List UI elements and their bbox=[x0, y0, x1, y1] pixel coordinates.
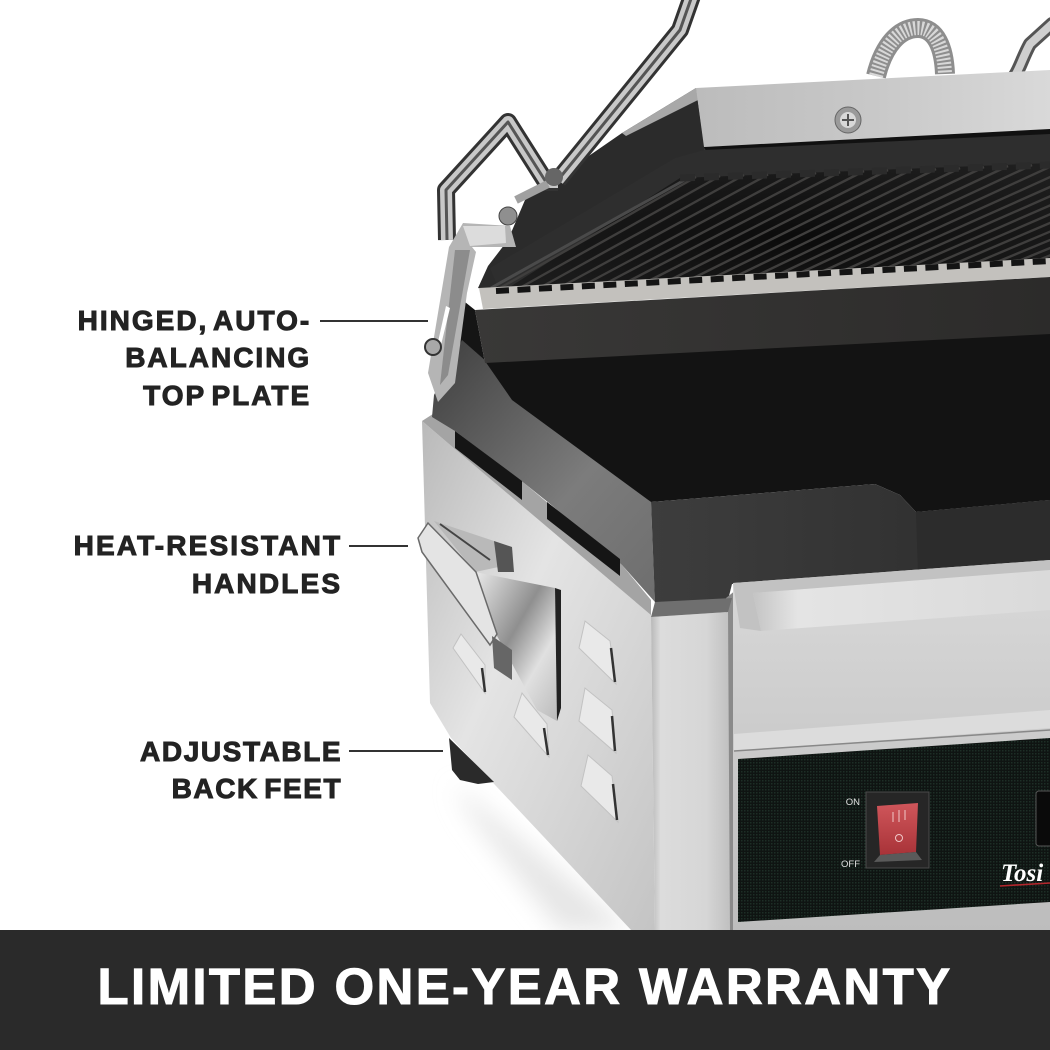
dark back casting of top plate bbox=[478, 88, 705, 292]
warranty banner bbox=[0, 930, 1050, 1050]
control panel bbox=[738, 738, 1050, 922]
chrome handle joint bbox=[545, 168, 563, 186]
icon: flexible hose at back bbox=[876, 28, 945, 76]
front face of lower plate bbox=[651, 484, 1050, 604]
dark wedge beside plate edge bbox=[452, 298, 485, 363]
back foot bbox=[449, 738, 494, 784]
metal top edge of base bbox=[422, 412, 651, 617]
silver strip under ribs bbox=[479, 258, 1050, 309]
leader line: feet bbox=[349, 750, 443, 752]
louvre shadows bbox=[482, 648, 617, 820]
label: adjustable back feet: BACK FEET bbox=[172, 773, 342, 804]
label: adjustable back feet bbox=[140, 736, 342, 804]
stainless side panel bbox=[422, 421, 655, 931]
label: hinged top plate: BALANCING bbox=[125, 342, 311, 373]
label: hinged top plate bbox=[78, 304, 311, 410]
logo: Tosi bbox=[1001, 860, 1043, 887]
textured plate edge bbox=[475, 277, 1050, 363]
label: heat-resistant handles: HEAT-RESISTANT bbox=[74, 530, 342, 561]
label: heat-resistant handles bbox=[74, 530, 342, 598]
upper chrome handle arm bbox=[558, 0, 692, 180]
right rear handle bbox=[1006, 24, 1050, 84]
steel hood with screw bbox=[696, 70, 1050, 152]
label: hinged top plate: HINGED, AUTO- bbox=[78, 304, 311, 336]
lower strip bbox=[734, 710, 1050, 751]
label: on: ON bbox=[846, 797, 860, 808]
side bolt bbox=[425, 339, 441, 355]
label: adjustable back feet: ADJUSTABLE bbox=[140, 736, 342, 766]
shiny edge of casting bbox=[622, 88, 698, 136]
leader line: hinged top plate bbox=[320, 320, 428, 322]
flat lower plate surface bbox=[485, 332, 1050, 512]
hinge bracket bbox=[425, 207, 517, 402]
label: heat-resistant handles: HANDLES bbox=[192, 568, 342, 598]
chrome side handle bbox=[418, 521, 561, 721]
digital display bbox=[1036, 791, 1050, 846]
seam behind post and front panel bbox=[726, 590, 736, 931]
side louvres bbox=[453, 621, 618, 822]
front panel bbox=[733, 560, 1050, 931]
side of lower plate bbox=[432, 340, 655, 602]
icon: red rocker switch bbox=[866, 792, 929, 868]
corner post bbox=[651, 612, 730, 931]
front lip bbox=[753, 570, 1050, 631]
lower plate notches bbox=[455, 431, 620, 576]
leader line: handles bbox=[349, 545, 408, 546]
label: hinged top plate: TOP PLATE bbox=[143, 380, 311, 410]
bolt bbox=[499, 207, 517, 225]
label: off: OFF bbox=[841, 859, 860, 870]
warranty banner: LIMITED ONE-YEAR WARRANTY bbox=[98, 958, 952, 1015]
lower chrome handle loop bbox=[446, 122, 558, 240]
floor shadow bbox=[455, 785, 632, 931]
grooved top plate bbox=[490, 134, 1050, 292]
